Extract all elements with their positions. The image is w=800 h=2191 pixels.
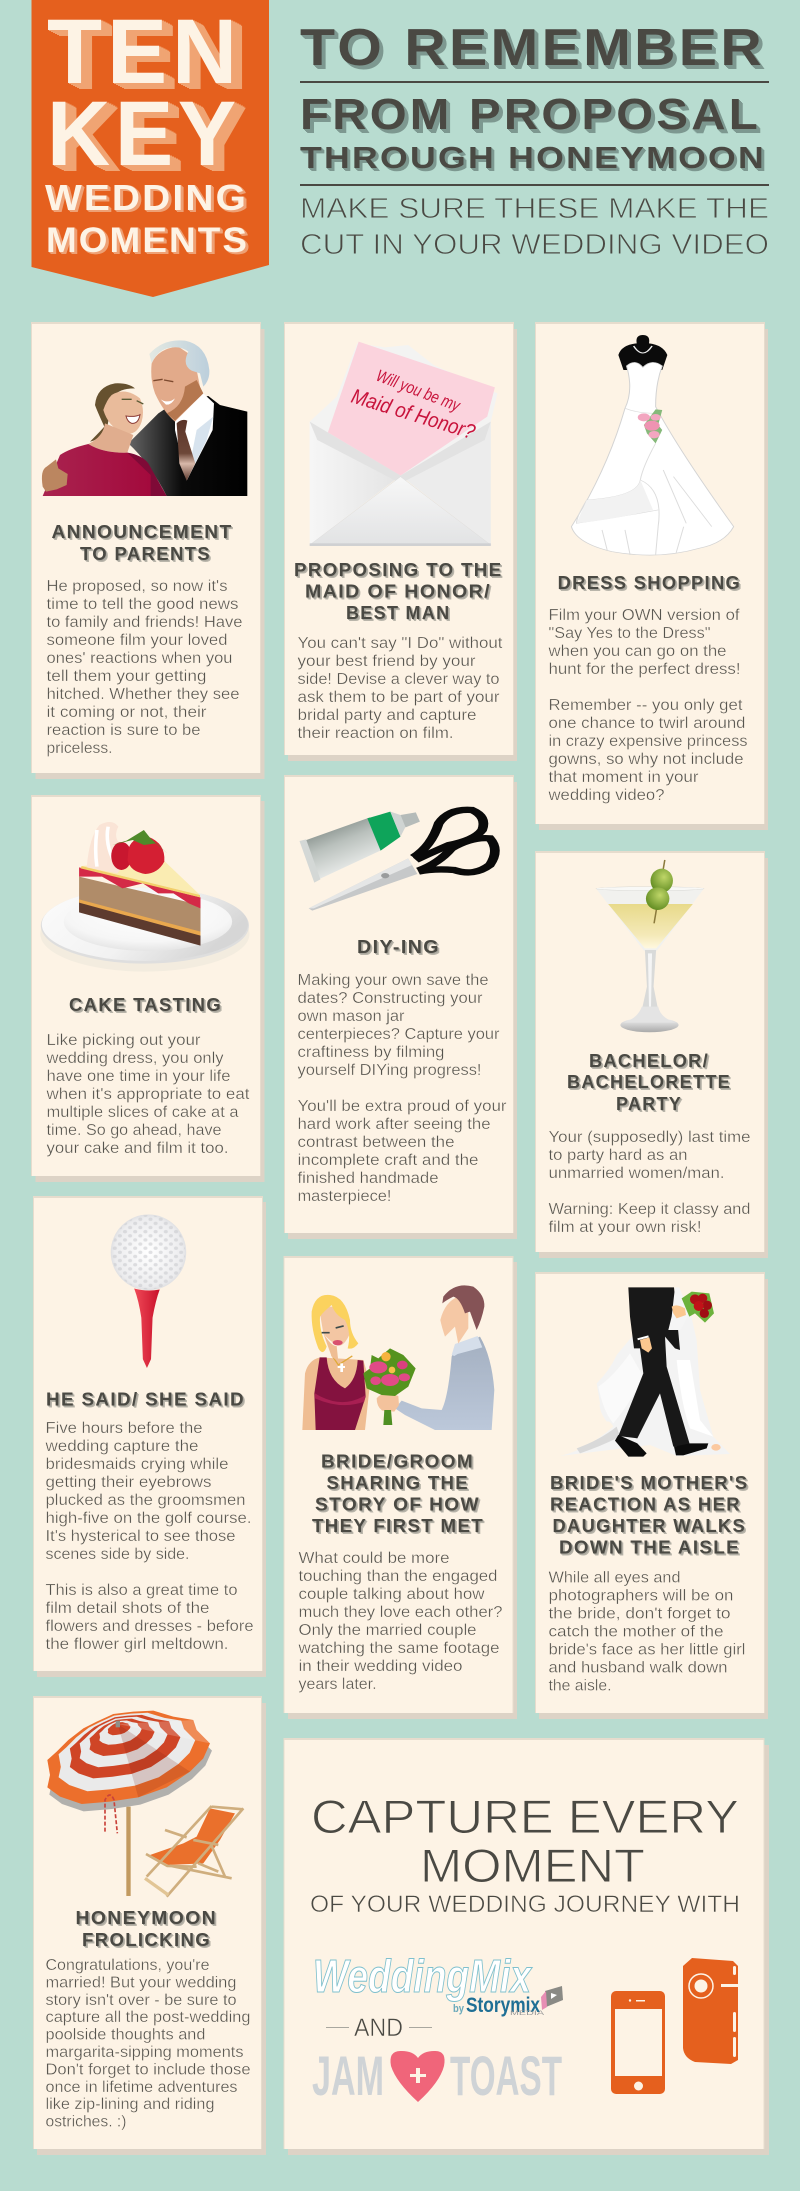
heading: PARTY <box>616 1094 682 1114</box>
banner title: ten key <box>47 1 242 185</box>
text block: that moment in your <box>548 769 698 786</box>
text block <box>45 1032 250 1157</box>
banner subtitle: wedding moments: MOMENTS <box>46 221 249 260</box>
text block: your cake and film it too. <box>46 1140 228 1157</box>
banner title: ten key: KEY <box>47 83 241 185</box>
heading: BRIDE'S MOTHER'S <box>550 1473 748 1493</box>
text block: unmarried women/man. <box>548 1165 724 1182</box>
text block: the flower girl meltdown. <box>46 1636 228 1653</box>
heading: REACTION AS HER <box>550 1494 741 1514</box>
card invitation text <box>349 366 478 444</box>
logo: jam and toast: JAM <box>312 2044 384 2107</box>
banner title: ten key: TEN <box>47 1 242 103</box>
text block <box>46 1957 250 2131</box>
text block: "Say Yes to the Dress" <box>548 625 710 642</box>
icon: wedding dress <box>571 335 734 555</box>
text block <box>44 1420 254 1653</box>
heading: HE SAID/ SHE SAID <box>46 1390 245 1410</box>
heading: BEST MAN <box>346 603 450 623</box>
subheading: CUT IN YOUR WEDDING VIDEO <box>300 229 769 261</box>
text block: to family and friends! Have <box>46 614 242 631</box>
text block: ones' reactions when you <box>46 650 233 667</box>
text block: priceless. <box>46 740 112 757</box>
heading: HONEYMOON <box>76 1908 217 1928</box>
main heading block <box>300 19 769 261</box>
heading: to remember: TO REMEMBER <box>300 19 765 77</box>
banner ribbon shape <box>32 0 269 297</box>
text block: hunt for the perfect dress! <box>548 661 740 678</box>
text block: Congratulations, you're <box>46 1957 210 1974</box>
heading <box>52 522 233 564</box>
text block: Making your own save the <box>298 972 488 989</box>
label: and: AND <box>354 2014 403 2042</box>
text block: finished handmade <box>298 1170 438 1187</box>
text block: much they love each other? <box>298 1604 503 1621</box>
call to action subheading: OF YOUR WEDDING JOURNEY WITH <box>310 1891 740 1918</box>
text block: hitched. Whether they see <box>46 686 240 703</box>
text block: tell them your getting <box>46 668 206 685</box>
text block: bridal party and capture <box>298 707 476 724</box>
panel: diy-ing <box>284 775 517 1239</box>
logo: wedding mix by storymix media: by <box>453 2003 465 2015</box>
text block: time to tell the good news <box>46 596 239 613</box>
text block: their reaction on film. <box>298 725 454 742</box>
text block: film at your own risk! <box>548 1219 702 1236</box>
heading: MAID OF HONOR/ <box>305 582 491 602</box>
icon: slice of cake on a plate <box>40 822 249 972</box>
text block: touching than the engaged <box>298 1568 498 1585</box>
text block <box>46 578 242 757</box>
text block: gowns, so why not include <box>548 751 744 768</box>
text block: yourself DIYing progress! <box>298 1062 482 1079</box>
text block: married! But your wedding <box>46 1974 236 1991</box>
text block: the aisle. <box>548 1678 612 1694</box>
subheading: MAKE SURE THESE MAKE THE <box>300 193 769 225</box>
text block: when it's appropriate to eat <box>45 1086 250 1103</box>
text block: one chance to twirl around <box>548 715 746 732</box>
text block: it coming or not, their <box>46 704 206 721</box>
text block: like zip-lining and riding <box>46 2096 214 2113</box>
banner: ten key wedding moments <box>32 0 269 297</box>
heading: TO PARENTS <box>80 544 211 564</box>
text block: Film your OWN version of <box>548 607 740 624</box>
text block: He proposed, so now it's <box>46 578 228 595</box>
text block: dates? Constructing your <box>298 990 482 1007</box>
icon: man giving woman a bouquet <box>302 1285 494 1430</box>
text block: ask them to be part of your <box>298 689 500 706</box>
heading: through honeymoon: THROUGH HONEYMOON <box>300 140 766 175</box>
text block <box>548 1129 750 1236</box>
text block: to party hard as an <box>548 1147 688 1164</box>
heading: DIY-ING <box>357 937 440 957</box>
text block: in their wedding video <box>298 1658 462 1675</box>
text block: wedding dress, you only <box>45 1050 224 1067</box>
icon: smartphone <box>611 1991 665 2094</box>
heading: FROLICKING <box>82 1930 211 1950</box>
text block <box>548 1570 746 1694</box>
text block: margarita-sipping moments <box>46 2044 244 2061</box>
text block: watching the same footage <box>297 1640 500 1657</box>
text block: poolside thoughts and <box>46 2027 206 2044</box>
icon: glue tube and scissors <box>299 810 495 911</box>
text block: incomplete craft and the <box>298 1152 478 1169</box>
text block: You can't say "I Do" without <box>298 635 503 652</box>
text block: someone film your loved <box>46 632 227 649</box>
panel: bride and groom story <box>284 1256 517 1719</box>
text block: capture all the post-wedding <box>46 2009 250 2026</box>
text block: scenes side by side. <box>46 1546 190 1563</box>
logo: wedding mix by storymix media: MEDIA <box>510 2011 544 2017</box>
call to action heading <box>311 1790 739 1892</box>
text block: Like picking out your <box>46 1032 200 1049</box>
banner subtitle: wedding moments <box>45 177 249 260</box>
heading: SHARING THE <box>326 1473 469 1493</box>
text block <box>298 972 506 1205</box>
panel: announcement to parents <box>31 322 264 779</box>
heading: BACHELOR/ <box>589 1051 709 1071</box>
logo: wedding mix by storymix media: Storymix <box>466 1994 540 2017</box>
text block <box>297 1550 503 1693</box>
text block: catch the mother of the <box>548 1624 724 1640</box>
text block: side! Devise a clever way to <box>298 671 500 688</box>
text block: your best friend by your <box>298 653 476 670</box>
call to action heading: CAPTURE EVERY <box>311 1790 739 1843</box>
heading: BACHELORETTE <box>567 1072 731 1092</box>
text block: the bride, don't forget to <box>548 1606 730 1622</box>
panel: honeymoon frolicking <box>33 1696 266 2155</box>
panel: proposing to the maid of honor <box>284 322 517 761</box>
text block: once in lifetime adventures <box>46 2079 238 2096</box>
heading <box>76 1908 217 1950</box>
heading: STORY OF HOW <box>315 1494 480 1514</box>
heading <box>294 560 502 623</box>
text block <box>298 635 503 742</box>
text block: have one time in your life <box>46 1068 230 1085</box>
text block: Don't forget to include those <box>46 2061 250 2078</box>
text block <box>547 607 748 804</box>
text block: centerpieces? Capture your <box>298 1026 500 1043</box>
text block: multiple slices of cake at a <box>46 1104 239 1121</box>
text block: flowers and dresses - before <box>46 1618 254 1635</box>
text block: Remember -- you only get <box>548 697 743 714</box>
text block: hard work after seeing the <box>298 1116 490 1133</box>
text block: photographers will be on <box>548 1588 734 1604</box>
subheading <box>300 193 769 261</box>
card invitation text: Maid of Honor? <box>349 385 478 444</box>
icon: laughing couple <box>42 340 247 496</box>
text block: couple talking about how <box>298 1586 485 1603</box>
heading: BRIDE/GROOM <box>321 1452 474 1472</box>
panel: bride's mother's reaction <box>535 1272 768 1719</box>
text block: getting their eyebrows <box>46 1474 212 1491</box>
icon: envelope and card <box>310 342 497 546</box>
text block: in crazy expensive princess <box>548 733 748 750</box>
text block: masterpiece! <box>298 1188 392 1205</box>
heading <box>312 1452 484 1536</box>
text block: wedding capture the <box>44 1438 198 1455</box>
text block: This is also a great time to <box>46 1582 237 1599</box>
logo: wedding mix by storymix media: WeddingMix <box>313 1950 533 2002</box>
icon: beach umbrella and deck chair <box>47 1711 243 1897</box>
panel: capture every moment <box>284 1738 769 2155</box>
logo: jam and toast: TOAST <box>450 2044 562 2107</box>
heading: ANNOUNCEMENT <box>52 522 233 542</box>
text block: wedding video? <box>547 787 665 804</box>
panel: cake tasting <box>31 795 264 1182</box>
heading: CAKE TASTING <box>69 995 222 1015</box>
text block: own mason jar <box>298 1008 404 1025</box>
banner subtitle: wedding moments: WEDDING <box>45 177 248 218</box>
text block: and husband walk down <box>548 1660 728 1676</box>
text block: years later. <box>298 1676 376 1693</box>
text block: film detail shots of the <box>46 1600 210 1617</box>
label: and <box>326 2014 432 2042</box>
text block: Five hours before the <box>46 1420 202 1437</box>
text block: contrast between the <box>298 1134 454 1151</box>
text block: Your (supposedly) last time <box>548 1129 750 1146</box>
text block: What could be more <box>298 1550 450 1567</box>
heading: DRESS SHOPPING <box>558 573 741 593</box>
heading: DAUGHTER WALKS <box>552 1516 746 1536</box>
text block: craftiness by filming <box>298 1044 444 1061</box>
text block: While all eyes and <box>548 1570 680 1586</box>
text block: high-five on the golf course. <box>46 1510 252 1527</box>
text block: It's hysterical to see those <box>46 1528 236 1545</box>
icon: martini glass <box>596 860 704 1032</box>
text block: bridesmaids crying while <box>46 1456 228 1473</box>
card invitation text: Will you be my <box>374 366 464 416</box>
text block: plucked as the groomsmen <box>46 1492 246 1509</box>
heading: from proposal: FROM PROPOSAL <box>300 90 761 139</box>
text block: reaction is sure to be <box>46 722 200 739</box>
logo: jam and toast <box>312 2044 562 2107</box>
heading <box>550 1473 748 1558</box>
text block: when you can go on the <box>547 643 726 660</box>
panel: he said she said <box>33 1196 266 1677</box>
text block: bride's face as her little girl <box>548 1642 746 1658</box>
call to action heading: MOMENT <box>420 1839 645 1892</box>
icon: golf ball on tee <box>111 1214 186 1368</box>
text block: ostriches. :) <box>46 2114 126 2131</box>
heading <box>567 1051 731 1114</box>
panel: dress shopping <box>535 322 768 830</box>
text block: Only the married couple <box>298 1622 476 1639</box>
icon: walking bride and groom <box>560 1287 730 1457</box>
panel: bachelor party <box>535 851 768 1258</box>
heading: THEY FIRST MET <box>312 1516 484 1536</box>
text block: story isn't over - be sure to <box>46 1992 236 2009</box>
text block: You'll be extra proud of your <box>298 1098 506 1115</box>
text block: time. So go ahead, have <box>46 1122 222 1139</box>
icon: pocket video camera <box>683 1958 738 2064</box>
heading: DOWN THE AISLE <box>559 1538 740 1558</box>
heading: PROPOSING TO THE <box>294 560 502 580</box>
text block: Warning: Keep it classy and <box>548 1201 750 1218</box>
